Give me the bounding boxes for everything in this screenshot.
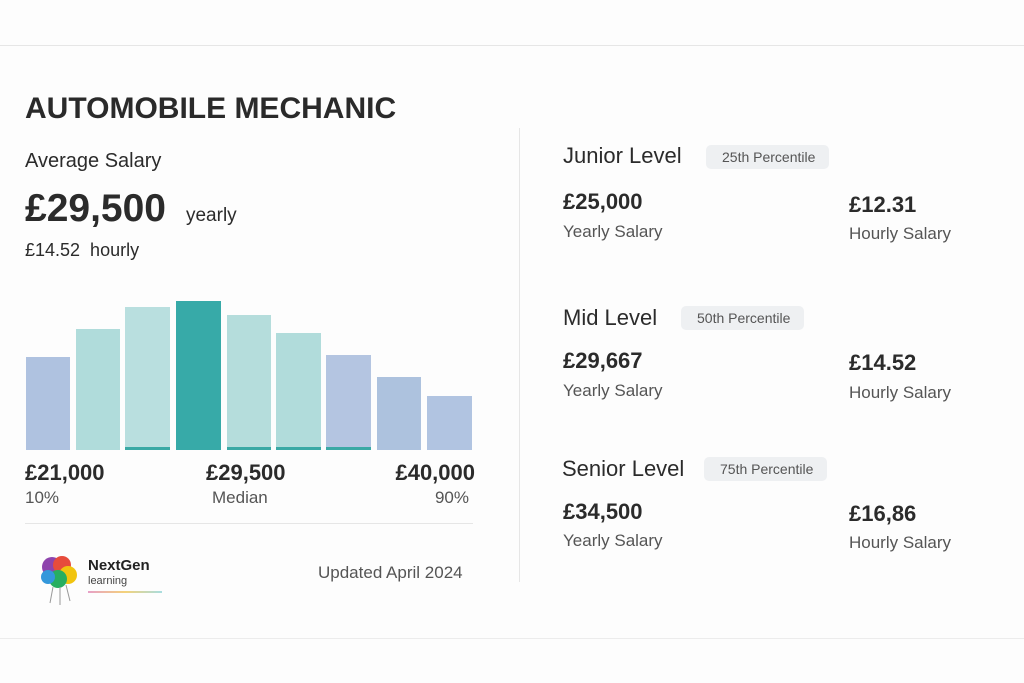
panel: mid level: £14.52 [849,350,916,375]
panel: junior level: £12.31 [849,192,916,217]
panel: junior level: Hourly Salary [849,224,951,243]
panel: junior level: Yearly Salary [563,222,663,241]
chart axis labels [25,460,475,507]
chart axis labels: £40,000 [395,460,475,485]
chart axis labels: 90% [435,488,469,507]
chart axis labels: £29,500 [206,460,286,485]
logo: NextGen learning: NextGen [88,557,150,574]
panel: junior level: Junior Level [563,143,682,168]
chart axis labels: Median [212,488,268,507]
panel: mid level: 50th Percentile [697,310,790,326]
panel: mid level: Yearly Salary [563,381,663,400]
panel: junior level [563,143,951,243]
panel: mid level: Hourly Salary [849,383,951,402]
panel: senior level: 75th Percentile [720,461,813,477]
panel: mid level: Mid Level [563,305,657,330]
panel: senior level: Yearly Salary [563,531,663,550]
panel: senior level: £16,86 [849,501,916,526]
chart axis labels: £21,000 [25,460,105,485]
updated date: Updated April 2024 [318,563,463,582]
panel: mid level [563,305,951,402]
logo: NextGen learning: learning [88,575,127,587]
panel: senior level: Hourly Salary [849,533,951,552]
panel: senior level: Senior Level [562,456,684,481]
heading: average salary: Average Salary [25,150,161,172]
logo: NextGen learning [41,556,162,605]
panel: junior level: 25th Percentile [722,149,815,165]
bar chart [26,301,472,450]
panel: senior level [562,456,951,552]
panel: junior level: £25,000 [563,189,643,214]
panel: mid level: £29,667 [563,348,643,373]
title: AUTOMOBILE MECHANIC [25,92,396,125]
hourly salary: £14.52 hourly [25,240,139,260]
yearly salary: £29,500 yearly [25,187,237,230]
panel: senior level: £34,500 [563,499,643,524]
chart axis labels: 10% [25,488,59,507]
